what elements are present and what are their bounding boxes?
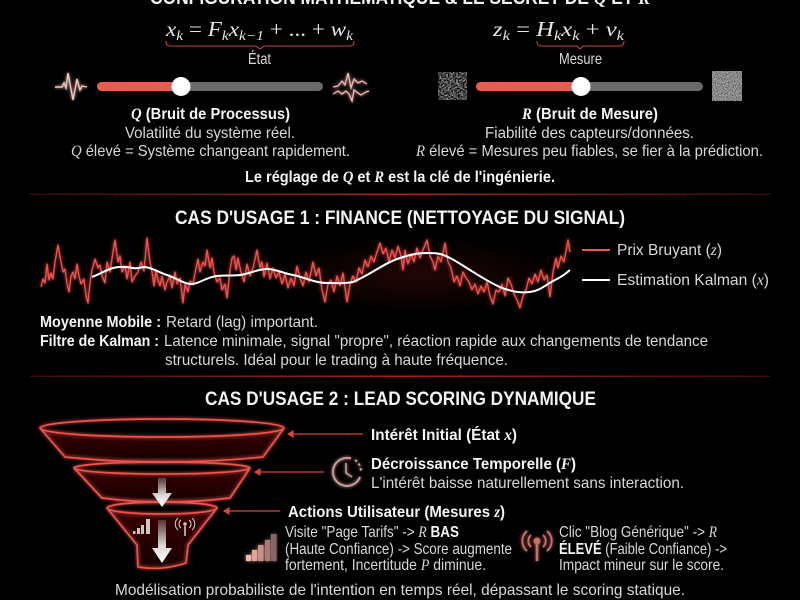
text: description de Q (71, 106, 350, 160)
panel: bruit de processus Q (55, 17, 369, 160)
text: décroissance temporelle (371, 456, 684, 492)
icon: barres dans l'entonnoir (133, 519, 150, 534)
icon: bruit élevé (712, 71, 742, 101)
equation: état: = (183, 17, 208, 41)
text: description de R: R élevé = Mesures peu fiables, se fier à la prédiction. (415, 143, 763, 160)
text: comparaison des méthodes: structurels. Idéal pour le trading à haute fréquence. (165, 352, 508, 369)
text: comparaison des méthodes (40, 314, 708, 369)
text: comparaison des méthodes: Latence minimale, signal "propre", réaction rapide aux changements de tendance (164, 333, 708, 350)
callout: réglage: Le réglage de Q et R est la clé de l'ingénierie. (245, 169, 555, 186)
label: état: État (248, 49, 271, 68)
equation: mesure: k (554, 29, 562, 44)
equation: mesure: k (503, 29, 511, 44)
equation: mesure: H (535, 17, 556, 41)
text: décroissance temporelle: L'intérêt baisse naturellement sans interaction. (371, 475, 684, 492)
funnel: niveau 2 (74, 462, 250, 502)
icon: signal faible (55, 73, 87, 100)
arrow: descente 2 (152, 520, 172, 563)
arrow: descente 1 (152, 478, 172, 507)
panel: cas d'usage 1 finance (40, 207, 769, 369)
equation: état: k−1 (239, 29, 264, 44)
text: comparaison des méthodes: Filtre de Kalman : (40, 333, 159, 350)
icon: antenne dans l'entonnoir (175, 518, 195, 536)
line: estimation Kalman (92, 253, 570, 292)
equation: mesure: k (572, 29, 580, 44)
arrow: actions utilisateur (224, 508, 280, 514)
equation: état: + ... + (264, 17, 331, 41)
equation: état: k (176, 29, 184, 44)
legend: estimation Kalman: Estimation Kalman (x) (617, 272, 769, 289)
equation: mesure: x (560, 17, 573, 41)
text: description de R (415, 106, 763, 160)
text: blog générique (559, 524, 727, 574)
panel: bruit de mesure R (415, 17, 763, 160)
equation: état: k (222, 29, 230, 44)
text: comparaison des méthodes: Retard (lag) important. (166, 314, 318, 331)
bracket: état (166, 41, 354, 49)
slider: R (476, 77, 703, 96)
text: description de R: R (Bruit de Mesure) (521, 106, 658, 123)
heading: cas d'usage 2: CAS D'USAGE 2 : LEAD SCORING DYNAMIQUE (205, 388, 596, 410)
text: conclusion: Modélisation probabiliste de l'intention en temps réel, dépassant le scoring statique. (115, 582, 685, 599)
text: description de Q: Q élevé = Système changeant rapidement. (71, 143, 350, 160)
equation: état: x (166, 17, 175, 41)
icon: barres de signal fort (246, 534, 276, 561)
arrow: décroissance (255, 469, 324, 475)
legend (582, 242, 769, 289)
text: page tarifs: Visite "Page Tarifs" -> R BAS (285, 524, 459, 541)
panel: cas d'usage 2 lead scoring (40, 388, 727, 599)
heading: cas d'usage 1: CAS D'USAGE 1 : FINANCE (NETTOYAGE DU SIGNAL) (175, 207, 625, 229)
text: page tarifs: (Haute Confiance) -> Score augmente (285, 541, 512, 558)
text: décroissance temporelle: Décroissance Temporelle (F) (371, 456, 576, 473)
legend: prix bruyant: Prix Bruyant (z) (617, 242, 722, 259)
arrow: intérêt initial (288, 431, 363, 437)
text: blog générique: Clic "Blog Générique" -> R (559, 524, 717, 541)
icon: horloge (333, 458, 361, 486)
icon: antenne signal faible (522, 531, 552, 561)
funnel diagram (40, 419, 284, 568)
equation: mesure: k (617, 29, 625, 44)
line: prix bruyant (41, 238, 570, 308)
text: intérêt initial: Intérêt Initial (État x) (371, 425, 517, 444)
text: comparaison des méthodes: Moyenne Mobile : (40, 314, 161, 331)
text: blog générique: Impact mineur sur le score. (559, 557, 724, 574)
equation: état: w (331, 17, 346, 41)
equation: mesure: v (606, 17, 617, 41)
text: page tarifs: fortement, Incertitude P diminue. (285, 557, 486, 574)
label: mesure: Mesure (559, 51, 602, 68)
panel: configuration mathématique (55, 0, 763, 186)
slider: Q (97, 77, 323, 96)
funnel: niveau 1 (40, 419, 284, 462)
equation: état: F (207, 17, 222, 41)
text: description de Q: Q (Bruit de Processus) (131, 106, 290, 123)
text: description de Q: Volatilité du système réel. (125, 125, 295, 142)
chart: prix bruyant et estimation Kalman (41, 237, 570, 313)
text: blog générique: ÉLEVÉ (Faible Confiance) -> (559, 539, 727, 558)
equation: état: k (346, 29, 354, 44)
icon: signal volatil (333, 73, 369, 101)
equation: mesure: = (510, 17, 536, 41)
text: actions utilisateur: Actions Utilisateur (Mesures z) (288, 504, 505, 521)
text: page tarifs (285, 524, 512, 574)
equation: état: x (228, 17, 240, 41)
equation: mesure: z (493, 17, 501, 41)
equation: mesure: + (580, 17, 606, 41)
bracket: mesure (537, 41, 624, 49)
funnel: niveau 3 (107, 502, 217, 568)
icon: bruit faible (438, 72, 467, 100)
text: description de R: Fiabilité des capteurs/données. (485, 125, 694, 142)
